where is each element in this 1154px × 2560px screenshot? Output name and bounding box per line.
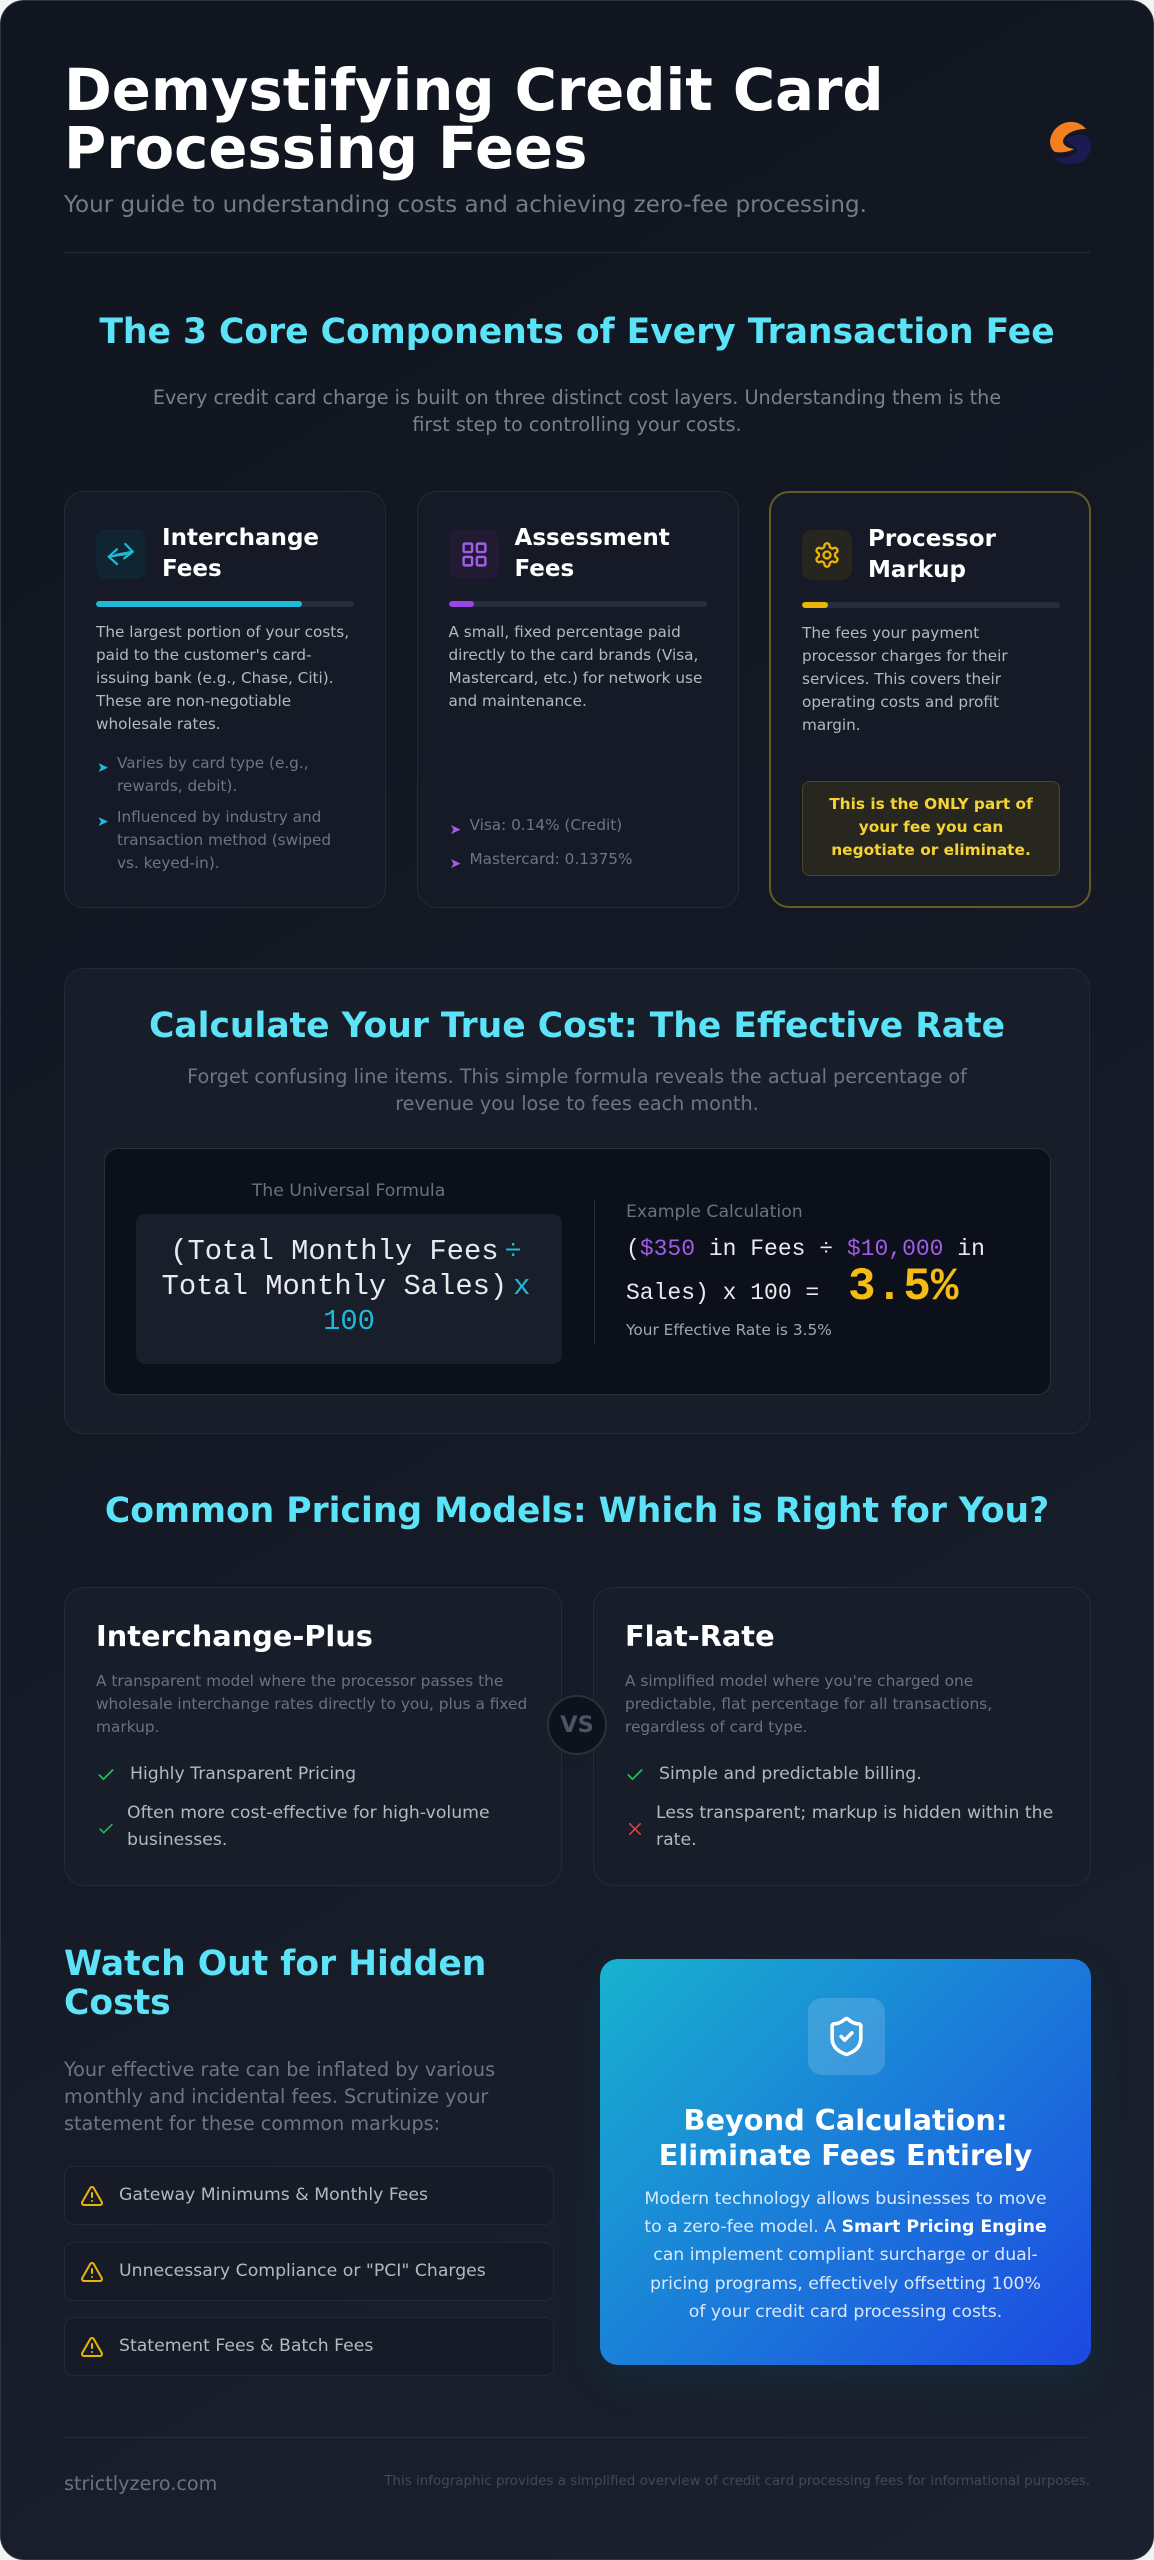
heading: pricing models: Common Pricing Models: Which is Right for You?: [105, 1491, 1049, 1531]
result value: 3.5%: [848, 1261, 958, 1313]
intro text: effective rate: revenue you lose to fees each month.: [395, 1092, 759, 1115]
item text: Statement Fees & Batch Fees: [119, 2336, 373, 2356]
icon: grid: [448, 529, 498, 579]
intro text: effective rate: Forget confusing line items. This simple formula reveals the actual percentage of: [187, 1065, 967, 1088]
model description: [96, 1672, 527, 1736]
list item: gateway minimums: [64, 2166, 554, 2225]
bullet list: transaction method (swiped: [117, 831, 331, 849]
card description: processor charges for their: [802, 647, 1008, 665]
icon: warning: [81, 2186, 103, 2206]
intro text: core components: [153, 386, 1001, 436]
icon: check: [98, 1769, 114, 1780]
panel: interchange fees: [64, 491, 386, 908]
heading: core components: The 3 Core Components of Every Transaction Fee: [99, 312, 1055, 352]
card description: The largest portion of your costs,: [96, 623, 349, 641]
model description: predictable, flat percentage for all transactions,: [625, 1695, 992, 1713]
card title: Interchange: [162, 525, 319, 551]
panel text: of your credit card processing costs.: [689, 2302, 1002, 2322]
card description: issuing bank (e.g., Chase, Citi).: [96, 669, 334, 687]
bullet list: vs. keyed-in).: [117, 854, 220, 872]
icon: gear: [802, 530, 852, 580]
model description: wholesale interchange rates directly to you, plus a fixed: [96, 1695, 527, 1713]
intro text: hidden costs: monthly and incidental fees. Scrutinize your: [64, 2085, 488, 2108]
panel text: pricing programs, effectively offsetting 100%: [650, 2274, 1041, 2294]
heading: effective rate: Calculate Your True Cost: The Effective Rate: [149, 1006, 1005, 1046]
bullet list: ➤: [450, 856, 461, 872]
card title: [868, 526, 996, 583]
title: Processing Fees: [64, 115, 587, 182]
bullet list: [450, 816, 632, 872]
intro text: hidden costs: statement for these common markups:: [64, 2112, 440, 2135]
panel: assessment fees: [416, 491, 738, 908]
brand name: strictlyzero.com: [64, 2472, 217, 2495]
share bar 10%: [802, 602, 1060, 608]
bullet list: [97, 754, 331, 872]
intro text: hidden costs: [64, 2058, 495, 2135]
formula box: [136, 1214, 562, 1364]
heading: hidden costs: Watch Out for Hidden: [64, 1944, 486, 1984]
bullet list: ➤: [97, 760, 109, 776]
item text: Unnecessary Compliance or "PCI" Charges: [119, 2261, 486, 2281]
panel heading: [659, 2103, 1032, 2172]
callout: negotiable: This is the ONLY part of: [829, 795, 1033, 813]
model description: A simplified model where you're charged one: [625, 1672, 973, 1690]
example calculation: Sales) x 100 =: [626, 1280, 819, 1306]
pro item: businesses.: [127, 1830, 227, 1850]
panel: effective rate: [64, 968, 1090, 1434]
formula label: The Universal Formula: [252, 1181, 445, 1201]
card description: These are non-negotiable: [96, 692, 291, 710]
bullet list: ➤: [97, 814, 109, 830]
formula box: 100: [323, 1305, 375, 1338]
con item: rate.: [656, 1830, 697, 1850]
list item: compliance: [64, 2242, 554, 2301]
badge: vs: VS: [560, 1712, 594, 1738]
card title: [514, 525, 670, 582]
con item: [656, 1803, 1053, 1850]
icon: check: [99, 1824, 113, 1834]
pro item: Often more cost-effective for high-volume: [127, 1803, 490, 1823]
intro text: core components: Every credit card charge is built on three distinct cost layers. Understanding them is the: [153, 386, 1001, 409]
footer: [64, 2437, 1090, 2495]
example calculation: ($350 in Fees ÷ $10,000 in: [626, 1236, 985, 1262]
title: Demystifying Credit Card: [64, 57, 884, 124]
intro text: hidden costs: Your effective rate can be inflated by various: [64, 2058, 495, 2081]
icon: check: [628, 1769, 642, 1780]
bullet list: rewards, debit).: [117, 777, 237, 795]
card title: Markup: [868, 557, 966, 583]
card description: Mastercard, etc.) for network use: [448, 669, 702, 687]
example label: Example Calculation: [626, 1202, 803, 1222]
share bar 10%: [448, 601, 706, 607]
header: [64, 57, 1090, 253]
panel heading: Eliminate Fees Entirely: [659, 2138, 1032, 2172]
card description: [96, 623, 349, 733]
card description: paid to the customer's card-: [96, 646, 312, 664]
callout: negotiable: [802, 781, 1060, 876]
formula box: Total Monthly Sales)x: [162, 1270, 530, 1303]
card title: Fees: [162, 556, 222, 582]
result note: Your Effective Rate is 3.5%: [626, 1321, 832, 1339]
formula box: (Total Monthly Fees÷: [170, 1235, 522, 1268]
intro text: effective rate: [187, 1065, 968, 1115]
panel text: to a zero-fee model. A Smart Pricing Engine: [644, 2217, 1047, 2237]
card description: directly to the card brands (Visa,: [448, 646, 698, 664]
model description: regardless of card type.: [625, 1718, 807, 1736]
share bar 80%: [96, 601, 354, 607]
model description: markup.: [96, 1718, 159, 1736]
card title: [162, 525, 319, 582]
pro item: Simple and predictable billing.: [659, 1764, 922, 1784]
bullet list: Varies by card type (e.g.,: [117, 754, 309, 772]
title: [64, 57, 884, 182]
bullet list: ➤: [450, 822, 461, 838]
callout: negotiable: your fee you can: [859, 818, 1003, 836]
pro item: [127, 1803, 490, 1850]
card description: [448, 623, 702, 710]
model title: Flat-Rate: [625, 1619, 775, 1653]
divider: [594, 1200, 595, 1343]
card description: [802, 624, 1008, 734]
card description: margin.: [802, 716, 861, 734]
bullet list: Mastercard: 0.1375%: [470, 850, 632, 868]
panel: flat-rate: [593, 1587, 1091, 1886]
icon: warning: [81, 2337, 103, 2357]
panel text: Modern technology allows businesses to move: [644, 2189, 1047, 2209]
card description: operating costs and profit: [802, 693, 999, 711]
subtitle: Your guide to understanding costs and achieving zero-fee processing.: [64, 192, 867, 218]
bullet list: Visa: 0.14% (Credit): [470, 816, 622, 834]
heading: hidden costs: [64, 1944, 486, 2023]
intro text: core components: first step to controlling your costs.: [412, 413, 742, 436]
model description: [625, 1672, 992, 1736]
item text: Gateway Minimums & Monthly Fees: [119, 2185, 428, 2205]
model description: A transparent model where the processor passes the: [96, 1672, 503, 1690]
icon: transfer arrows: [96, 529, 146, 579]
card description: services. This covers their: [802, 670, 1001, 688]
card title: Fees: [514, 556, 574, 582]
pro item: Highly Transparent Pricing: [130, 1764, 356, 1784]
con item: Less transparent; markup is hidden within the: [656, 1803, 1053, 1823]
panel heading: Beyond Calculation:: [684, 2103, 1007, 2137]
card description: The fees your payment: [802, 624, 979, 642]
disclaimer: This infographic provides a simplified overview of credit card processing fees for informational purposes.: [384, 2474, 1090, 2489]
panel: interchange-plus: [64, 1587, 562, 1886]
panel text: can implement compliant surcharge or dual-: [653, 2245, 1038, 2265]
panel: processor markup: [769, 491, 1091, 908]
icon: logo: [1050, 122, 1090, 164]
badge: vs: [547, 1695, 607, 1755]
card title: Processor: [868, 526, 996, 552]
panel text: [644, 2189, 1047, 2322]
card description: A small, fixed percentage paid: [448, 623, 681, 641]
icon: warning: [81, 2262, 103, 2282]
bullet list: Influenced by industry and: [117, 808, 321, 826]
card description: and maintenance.: [448, 692, 587, 710]
callout: negotiable: negotiate or eliminate.: [831, 841, 1031, 859]
list item: statement fees: [64, 2317, 554, 2376]
formula panel: [104, 1148, 1051, 1395]
panel: eliminate fees: [600, 1959, 1091, 2365]
heading: hidden costs: Costs: [64, 1983, 171, 2023]
card description: wholesale rates.: [96, 715, 221, 733]
icon: cross: [629, 1823, 641, 1835]
model title: Interchange-Plus: [96, 1619, 373, 1653]
example calculation: [626, 1236, 985, 1313]
icon: shield check: [808, 1998, 885, 2075]
card title: Assessment: [514, 525, 670, 551]
